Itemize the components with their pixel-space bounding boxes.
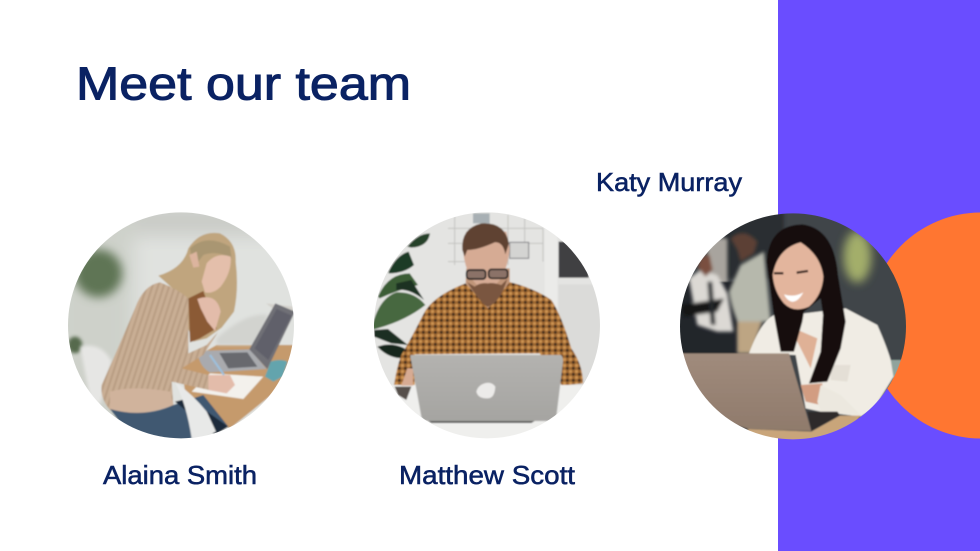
photo: Alaina Smith xyxy=(68,212,294,438)
panel: purple side band xyxy=(778,0,980,551)
photo: Katy Murray xyxy=(680,213,906,440)
photo: Matthew Scott xyxy=(374,212,600,438)
name: Matthew Scott: Matthew Scott xyxy=(399,460,576,490)
name: Alaina Smith: Alaina Smith xyxy=(103,460,257,490)
title: Meet our team xyxy=(76,58,411,110)
decorative orange circle xyxy=(868,212,980,438)
name: Katy Murray: Katy Murray xyxy=(596,167,742,197)
